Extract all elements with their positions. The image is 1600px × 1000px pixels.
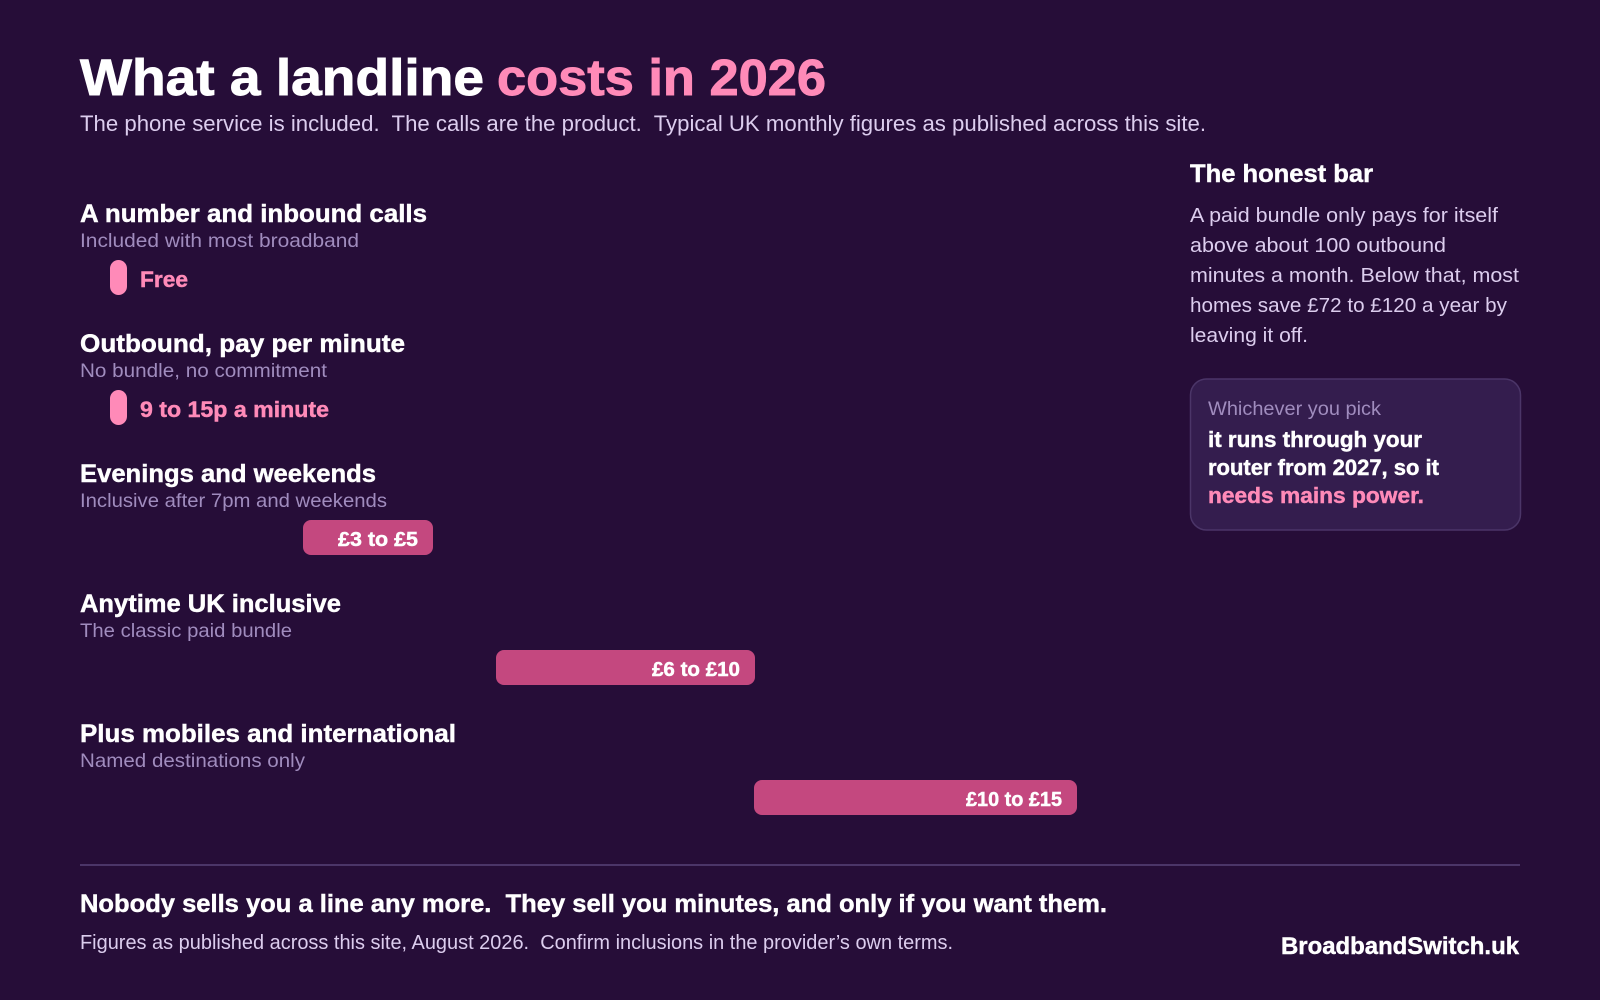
brand: BroadbandSwitch.uk xyxy=(1281,933,1520,960)
row heading: Outbound, pay per minute xyxy=(80,330,405,358)
row heading: A number and inbound calls xyxy=(80,200,427,228)
row description: Included with most broadband xyxy=(80,230,359,252)
row heading: Anytime UK inclusive xyxy=(80,590,341,618)
bar: free xyxy=(110,260,127,295)
row description: No bundle, no commitment xyxy=(80,360,328,382)
value: free: Free xyxy=(140,267,188,292)
bar: plus mobiles xyxy=(754,780,1077,815)
title xyxy=(80,49,826,106)
panel heading: The honest bar xyxy=(1190,160,1373,188)
header xyxy=(80,49,1206,136)
panel body text: above about 100 outbound xyxy=(1190,234,1446,257)
value: plus mobiles: £10 to £15 xyxy=(966,788,1062,811)
row heading: Evenings and weekends xyxy=(80,460,376,488)
row: plus mobiles and international xyxy=(80,720,1077,815)
row description: Named destinations only xyxy=(80,750,305,772)
panel body text: A paid bundle only pays for itself xyxy=(1190,204,1498,227)
bar: anytime xyxy=(496,650,755,685)
footer xyxy=(80,890,1520,960)
callout card xyxy=(1190,379,1520,530)
row description: Inclusive after 7pm and weekends xyxy=(80,490,387,512)
value: pay per minute: 9 to 15p a minute xyxy=(140,397,329,422)
callout statement xyxy=(1208,427,1440,508)
callout statement: needs mains power. xyxy=(1208,483,1424,508)
row heading: Plus mobiles and international xyxy=(80,720,456,748)
row: outbound pay per minute xyxy=(80,330,405,425)
callout statement: router from 2027, so it xyxy=(1208,455,1440,480)
panel body text: minutes a month. Below that, most xyxy=(1190,264,1519,287)
callout statement: it runs through your xyxy=(1208,427,1422,452)
title: What a landline xyxy=(80,49,484,106)
panel body text: homes save £72 to £120 a year by xyxy=(1190,294,1508,317)
source note: Figures as published across this site, August 2026. Confirm inclusions in the provider’s own terms. xyxy=(80,932,953,954)
value: evenings and weekends: £3 to £5 xyxy=(338,528,418,551)
bar chart: landline costs xyxy=(80,200,1077,815)
value: anytime: £6 to £10 xyxy=(652,658,740,681)
title: costs in 2026 xyxy=(497,49,826,106)
row: evenings and weekends xyxy=(80,460,433,555)
panel body text: leaving it off. xyxy=(1190,324,1308,347)
callout label: Whichever you pick xyxy=(1208,398,1381,420)
row description: The classic paid bundle xyxy=(80,620,292,642)
panel: the honest bar xyxy=(1190,160,1520,530)
panel body text xyxy=(1190,204,1519,347)
subtitle: The phone service is included. The calls are the product. Typical UK monthly figures as published across this site. xyxy=(80,111,1206,136)
bar: pay per minute xyxy=(110,390,127,425)
bar: evenings and weekends xyxy=(303,520,433,555)
footer takeaway: Nobody sells you a line any more. They sell you minutes, and only if you want them. xyxy=(80,890,1107,918)
row: number and inbound calls xyxy=(80,200,427,295)
row: anytime UK inclusive xyxy=(80,590,755,685)
